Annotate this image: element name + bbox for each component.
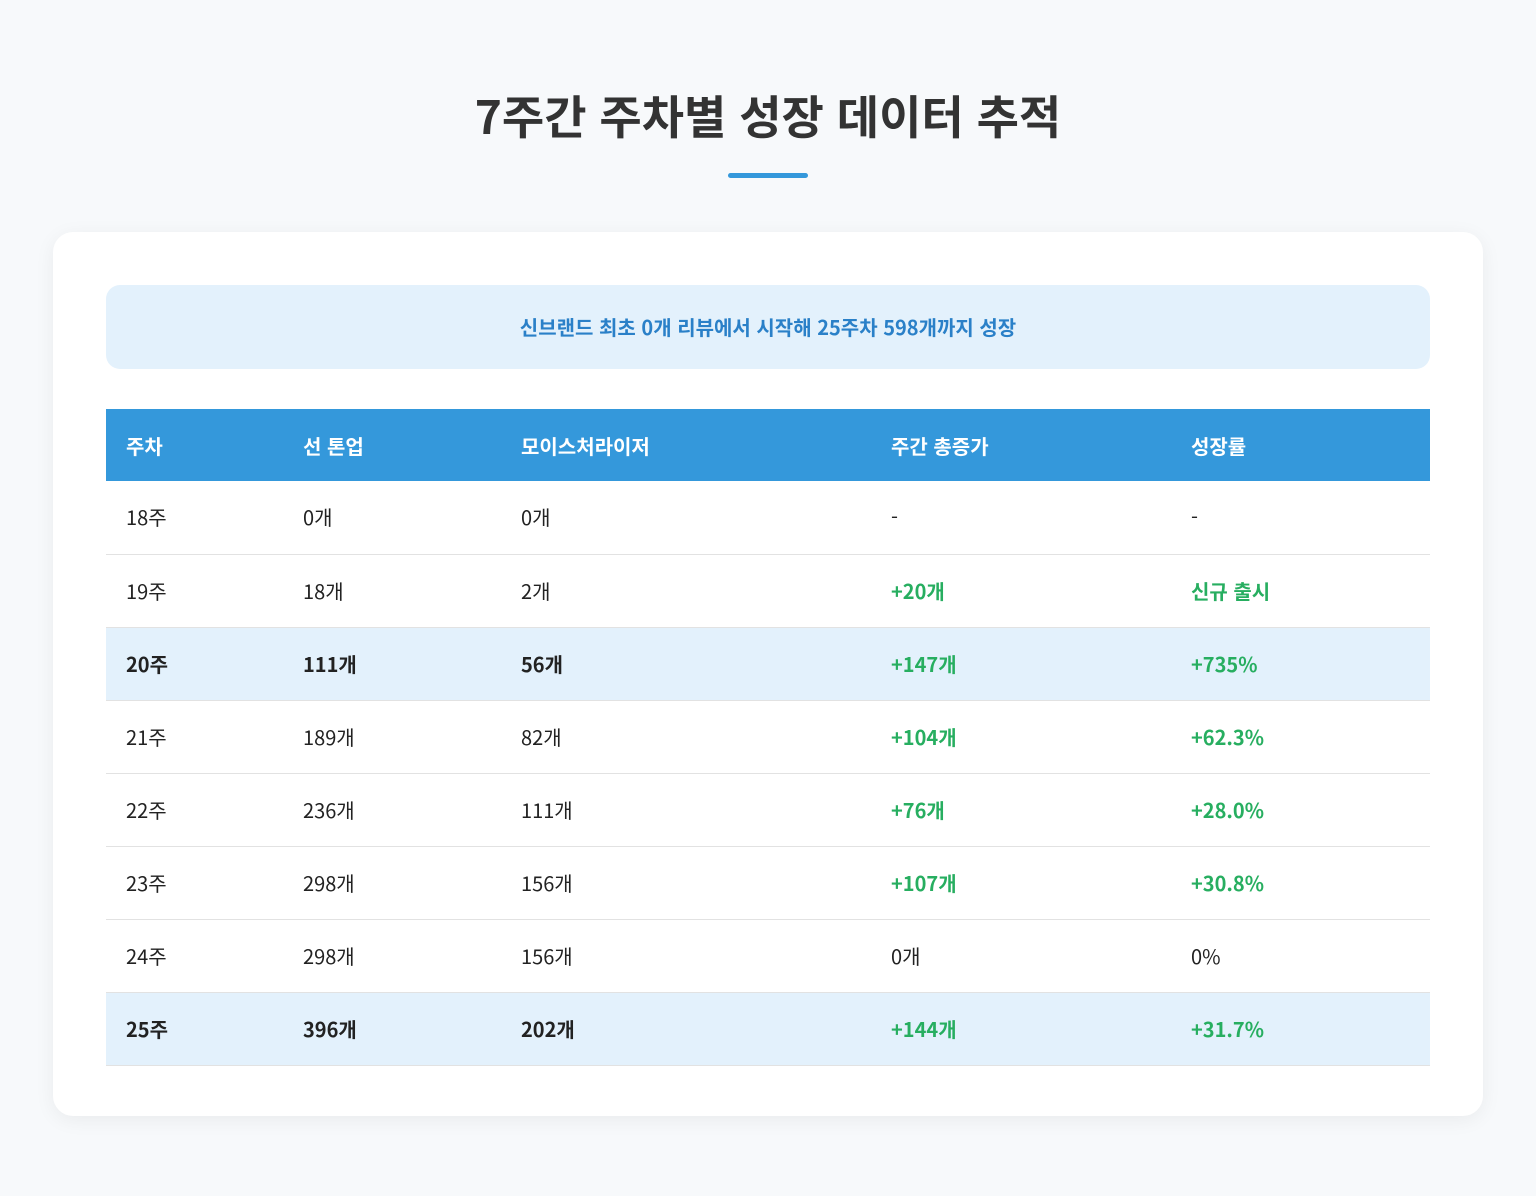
- data table: +147개: [891, 648, 957, 678]
- data table: +76개: [891, 794, 945, 824]
- data table: 성장률: [1191, 430, 1246, 460]
- panel: data card: [53, 232, 1483, 1116]
- data table: 18개: [303, 576, 344, 604]
- title underline: [728, 173, 808, 178]
- data table: 0개: [521, 502, 550, 531]
- data table: 2개: [521, 576, 550, 604]
- data table: 21주: [126, 722, 167, 750]
- data table: 111개: [303, 648, 357, 678]
- data table: 주차: [126, 430, 163, 460]
- data table: 236개: [303, 794, 355, 824]
- data table: 모이스처라이저: [521, 430, 650, 460]
- data table: +144개: [891, 1014, 957, 1042]
- data table: 20주: [126, 648, 168, 678]
- data table: +735%: [1191, 648, 1257, 678]
- data table: 25주: [126, 1014, 168, 1042]
- data table: +28.0%: [1191, 794, 1264, 824]
- data table: 0개: [891, 940, 920, 970]
- data table: [106, 409, 1430, 1066]
- data table: 신규 출시: [1191, 576, 1270, 604]
- data table: 111개: [521, 794, 573, 824]
- data table: 298개: [303, 940, 355, 970]
- data table: 0개: [303, 502, 332, 531]
- data table: 0%: [1191, 940, 1221, 970]
- data table: -: [891, 502, 898, 531]
- data table: 396개: [303, 1014, 357, 1042]
- data table: 19주: [126, 576, 167, 604]
- data table: 56개: [521, 648, 563, 678]
- data table: 82개: [521, 722, 562, 750]
- data table: 202개: [521, 1014, 575, 1042]
- callout: 신브랜드 최초 0개 리뷰에서 시작해 25주차 598개까지 성장: [520, 312, 1016, 341]
- data table: 18주: [126, 502, 167, 531]
- callout: [106, 285, 1430, 369]
- data table: +62.3%: [1191, 722, 1264, 750]
- data table: 156개: [521, 940, 573, 970]
- data table: +30.8%: [1191, 868, 1264, 896]
- data table: 156개: [521, 868, 573, 896]
- data table: +104개: [891, 722, 957, 750]
- data table: 23주: [126, 868, 167, 896]
- title: 7주간 주차별 성장 데이터 추적: [475, 82, 1061, 148]
- data table: 22주: [126, 794, 167, 824]
- data table: 선 톤업: [303, 430, 364, 460]
- data table: +20개: [891, 576, 945, 604]
- data table: 189개: [303, 722, 355, 750]
- data table: +31.7%: [1191, 1014, 1264, 1042]
- data table: +107개: [891, 868, 957, 896]
- data table: -: [1191, 502, 1198, 531]
- data table: 주간 총증가: [891, 430, 989, 460]
- data table: 298개: [303, 868, 355, 896]
- data table: 24주: [126, 940, 167, 970]
